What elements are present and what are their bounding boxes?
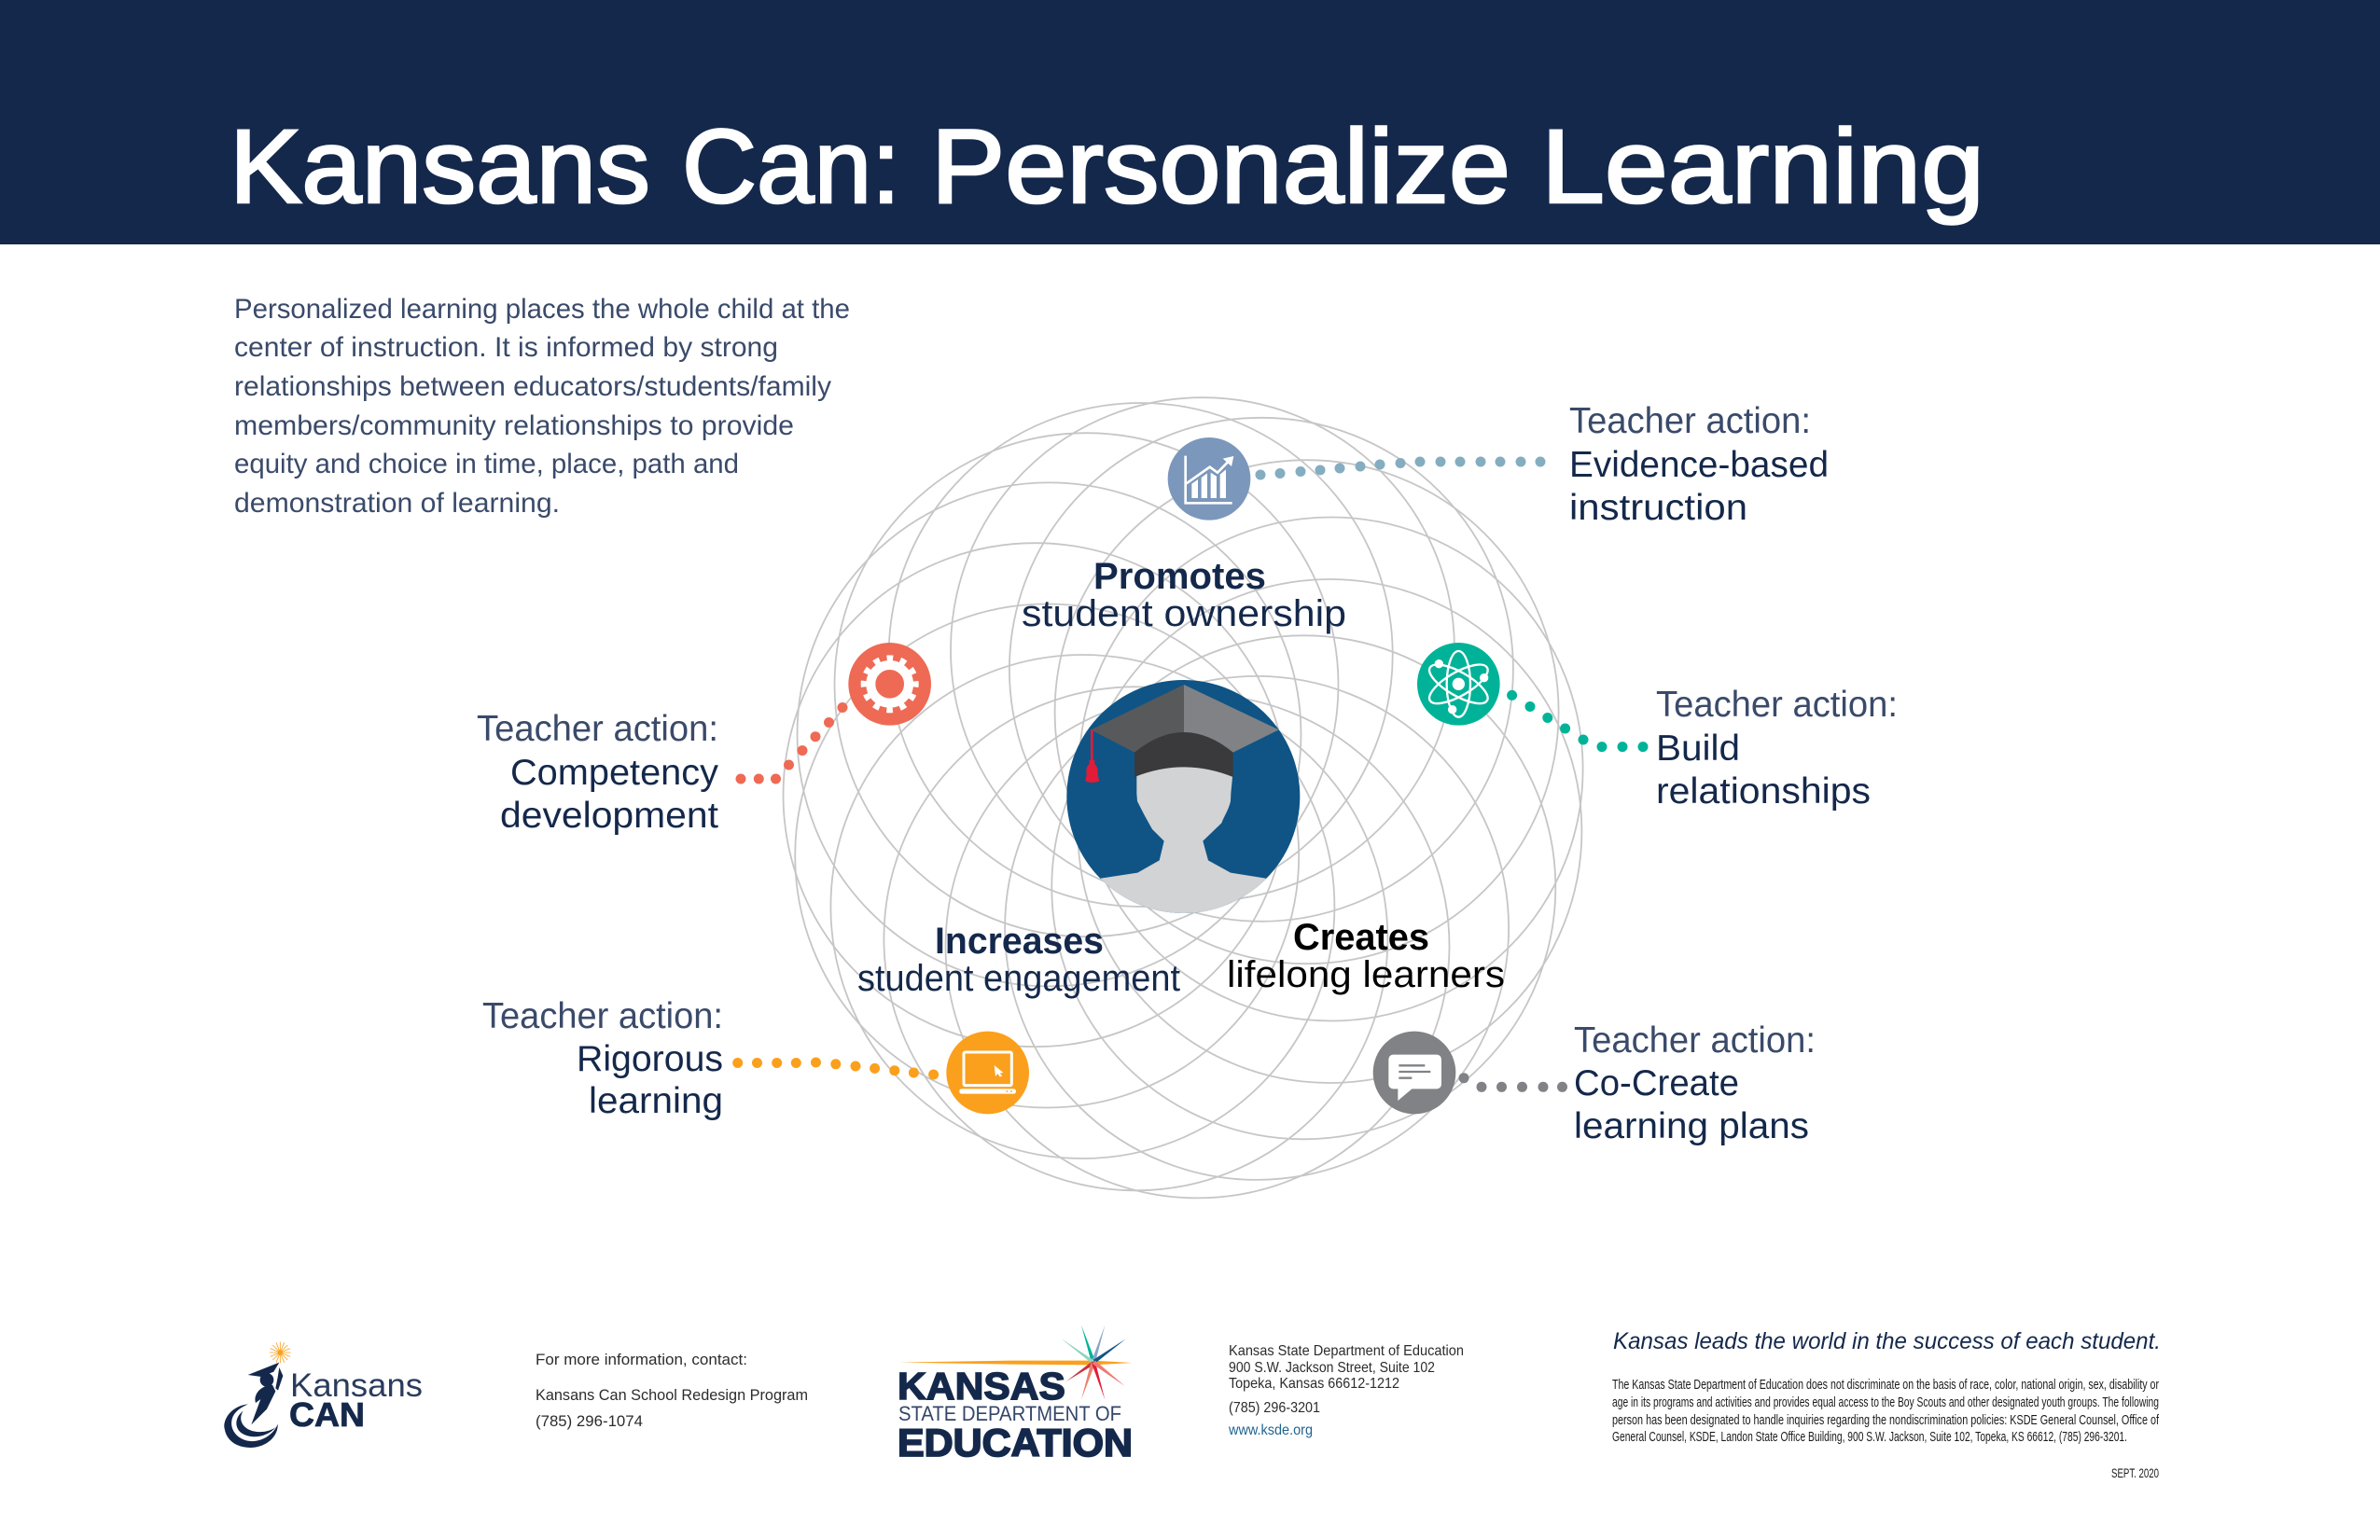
intro paragraph: Personalized learning places the whole child at the	[234, 294, 850, 325]
icon: rising bar chart	[1168, 437, 1250, 520]
dotted connector: build relationships	[1507, 690, 1648, 752]
center label: promotes student ownership: Promotes	[1093, 556, 1266, 597]
teacher action: evidence-based instruction: Evidence-based	[1569, 445, 1829, 485]
nondiscrimination notice: The Kansas State Department of Education does not discriminate on the basis of race, color, national origin, sex, disability or	[1612, 1377, 2159, 1393]
icon: atom	[1417, 643, 1500, 726]
date: SEPT. 2020	[2111, 1465, 2159, 1480]
contact block	[536, 1351, 808, 1430]
teacher action: build relationships: Teacher action:	[1656, 685, 1898, 725]
title	[230, 108, 1984, 225]
icon: laptop	[946, 1032, 1029, 1114]
central student avatar	[1066, 680, 1300, 920]
dotted connector: rigorous learning	[732, 1058, 939, 1080]
teacher action: co-create learning plans: Co-Create	[1574, 1063, 1739, 1103]
logo: Kansas State Department of Education: STATE DEPARTMENT OF	[898, 1402, 1121, 1425]
KSDE address block: Topeka, Kansas 66612-1212	[1229, 1376, 1399, 1392]
title: Can:	[682, 108, 900, 225]
center label: creates lifelong learners: lifelong learners	[1227, 954, 1505, 995]
center label: promotes student ownership	[1022, 556, 1346, 634]
spirograph circle network	[784, 397, 1583, 1198]
intro paragraph	[234, 294, 850, 519]
teacher action: rigorous learning: Rigorous	[577, 1039, 723, 1079]
logo: Kansans Can	[224, 1342, 423, 1448]
icon: gear	[848, 643, 931, 726]
vision statement: Kansas leads the world in the success of each student.	[1613, 1328, 2161, 1354]
teacher action: build relationships	[1656, 685, 1898, 812]
teacher action: co-create learning plans: learning plans	[1574, 1106, 1809, 1146]
center label: creates lifelong learners: Creates	[1293, 917, 1429, 958]
nondiscrimination notice: person has been designated to handle inquiries regarding the nondiscrimination policies: KSDE General Counsel, Office of	[1612, 1412, 2160, 1428]
dotted connector: competency development	[735, 702, 847, 784]
teacher action: competency development: development	[500, 796, 718, 836]
KSDE address block	[1228, 1343, 1464, 1438]
teacher action: competency development: Competency	[510, 753, 719, 793]
center label: increases student engagement	[857, 921, 1180, 999]
logo: Kansans Can: Kansans	[290, 1367, 423, 1404]
center label: creates lifelong learners	[1227, 917, 1505, 995]
dotted connector: evidence-based instruction	[1256, 457, 1545, 479]
teacher action: build relationships: relationships	[1656, 771, 1871, 812]
logo: Kansas State Department of Education	[898, 1325, 1133, 1464]
KSDE address block: (785) 296-3201	[1229, 1400, 1320, 1416]
center label: increases student engagement: student engagement	[857, 958, 1180, 999]
logo: Kansas State Department of Education: KANSAS	[898, 1365, 1065, 1408]
teacher action: rigorous learning: Teacher action:	[482, 996, 723, 1036]
intro paragraph: center of instruction. It is informed by strong	[234, 332, 778, 363]
intro paragraph: relationships between educators/students/family	[234, 371, 831, 402]
icon: spark star	[270, 1342, 291, 1363]
contact block: For more information, contact:	[536, 1351, 747, 1368]
intro paragraph: demonstration of learning.	[234, 488, 560, 519]
teacher action: evidence-based instruction: Teacher action:	[1569, 401, 1811, 441]
nondiscrimination notice: General Counsel, KSDE, Landon State Office Building, 900 S.W. Jackson, Suite 102, Topeka, KS 66612, (785) 296-3201.	[1612, 1429, 2127, 1445]
center label: promotes student ownership: student ownership	[1022, 593, 1346, 634]
teacher action: rigorous learning	[482, 996, 723, 1121]
title: Personalize	[931, 108, 1510, 225]
contact block: Kansans Can School Redesign Program	[536, 1386, 808, 1404]
nondiscrimination notice	[1612, 1377, 2160, 1445]
KSDE address block: www.ksde.org	[1228, 1422, 1313, 1438]
logo: Kansas State Department of Education: EDUCATION	[898, 1421, 1133, 1464]
logo: Kansans Can: CAN	[289, 1395, 365, 1434]
center label: increases student engagement: Increases	[935, 921, 1104, 962]
intro paragraph: members/community relationships to provide	[234, 410, 794, 441]
title: Learning	[1541, 108, 1984, 225]
teacher action: competency development	[477, 709, 719, 836]
KSDE address block: 900 S.W. Jackson Street, Suite 102	[1229, 1360, 1435, 1376]
teacher action: competency development: Teacher action:	[477, 709, 718, 749]
teacher action: co-create learning plans: Teacher action:	[1574, 1020, 1816, 1061]
teacher action: evidence-based instruction: instruction	[1569, 488, 1747, 528]
intro paragraph: equity and choice in time, place, path and	[234, 449, 739, 479]
teacher action: rigorous learning: learning	[589, 1081, 723, 1121]
icon: star burst	[899, 1325, 1132, 1400]
teacher action: evidence-based instruction	[1569, 401, 1829, 528]
KSDE address block: Kansas State Department of Education	[1229, 1343, 1464, 1359]
icon: graduate figure	[224, 1363, 283, 1448]
teacher action: co-create learning plans	[1574, 1020, 1816, 1146]
dotted connector: co-create learning plans	[1459, 1073, 1567, 1092]
icon: chat bubble	[1373, 1032, 1455, 1114]
contact block: (785) 296-1074	[536, 1412, 643, 1430]
title: Kansans	[230, 108, 650, 225]
header banner	[0, 0, 2380, 244]
teacher action: build relationships: Build	[1656, 728, 1740, 769]
